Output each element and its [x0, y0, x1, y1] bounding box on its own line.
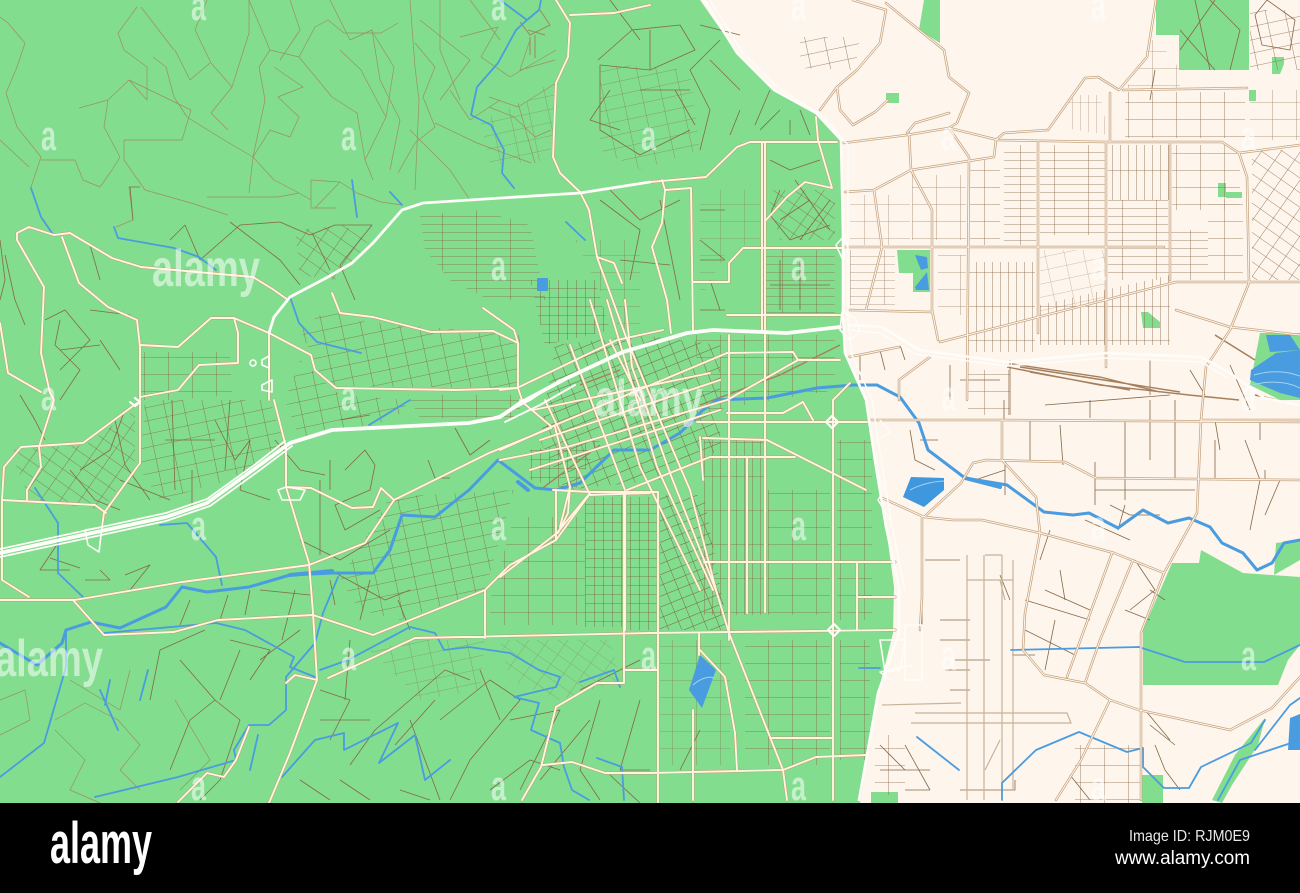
watermark small marks: a	[341, 632, 356, 679]
watermark small marks: a	[1241, 112, 1256, 159]
lake: small pond	[537, 278, 548, 291]
watermark small marks: a	[1241, 632, 1256, 679]
watermark large: alamy	[152, 240, 260, 298]
lakes	[537, 255, 1300, 750]
footer bar	[0, 803, 1300, 893]
panel: green parks east side	[871, 0, 1300, 803]
watermark small marks: a	[341, 372, 356, 419]
lake: south reservoir	[689, 655, 716, 708]
minor roads west	[0, 0, 830, 803]
watermark small marks: a	[941, 632, 956, 679]
northwest hill trails	[0, 0, 556, 227]
panel: green parkland and residential area	[0, 0, 894, 803]
watermark small marks: a	[341, 112, 356, 159]
watermark small marks: a	[641, 632, 656, 679]
watermark small marks: a	[191, 502, 206, 549]
main river	[0, 385, 1300, 665]
watermark small marks: a	[41, 112, 56, 159]
watermark small marks: a	[941, 372, 956, 419]
lake: east reservoir	[903, 477, 944, 507]
lake: southeast pond	[1288, 714, 1300, 750]
watermark small marks: a	[1091, 242, 1106, 289]
watermark small marks: a	[791, 762, 806, 809]
watermark small marks: a	[191, 762, 206, 809]
lake: park ponds	[915, 255, 929, 290]
arterial roads west and central	[0, 0, 895, 803]
railway lines	[540, 335, 1300, 490]
street grids residential west and central	[10, 65, 872, 765]
minor roads east	[860, 0, 1300, 800]
watermark small marks: a	[941, 112, 956, 159]
watermark small marks: a	[791, 242, 806, 289]
watermark small marks: a	[1091, 502, 1106, 549]
airport runway lines	[882, 555, 1071, 800]
watermark large: alamy	[595, 370, 703, 428]
street grids east side	[800, 10, 1300, 803]
watermark small marks: a	[491, 762, 506, 809]
lake: northeast reservoir	[1250, 335, 1300, 398]
watermark small marks: a	[1241, 372, 1256, 419]
watermark large	[0, 240, 703, 688]
footer website: www.alamy.com	[1114, 848, 1250, 869]
southwest hill trails	[0, 670, 210, 803]
watermark small marks: a	[41, 372, 56, 419]
footer logo: alamy	[50, 811, 152, 876]
arterial roads east	[820, 0, 1300, 800]
watermark small marks: a	[791, 502, 806, 549]
watermark small marks: a	[641, 112, 656, 159]
watermark small marks: a	[1091, 762, 1106, 809]
footer image id: Image ID: RJM0E9	[1129, 828, 1250, 845]
watermark small marks: a	[491, 242, 506, 289]
watermark small marks: a	[491, 502, 506, 549]
